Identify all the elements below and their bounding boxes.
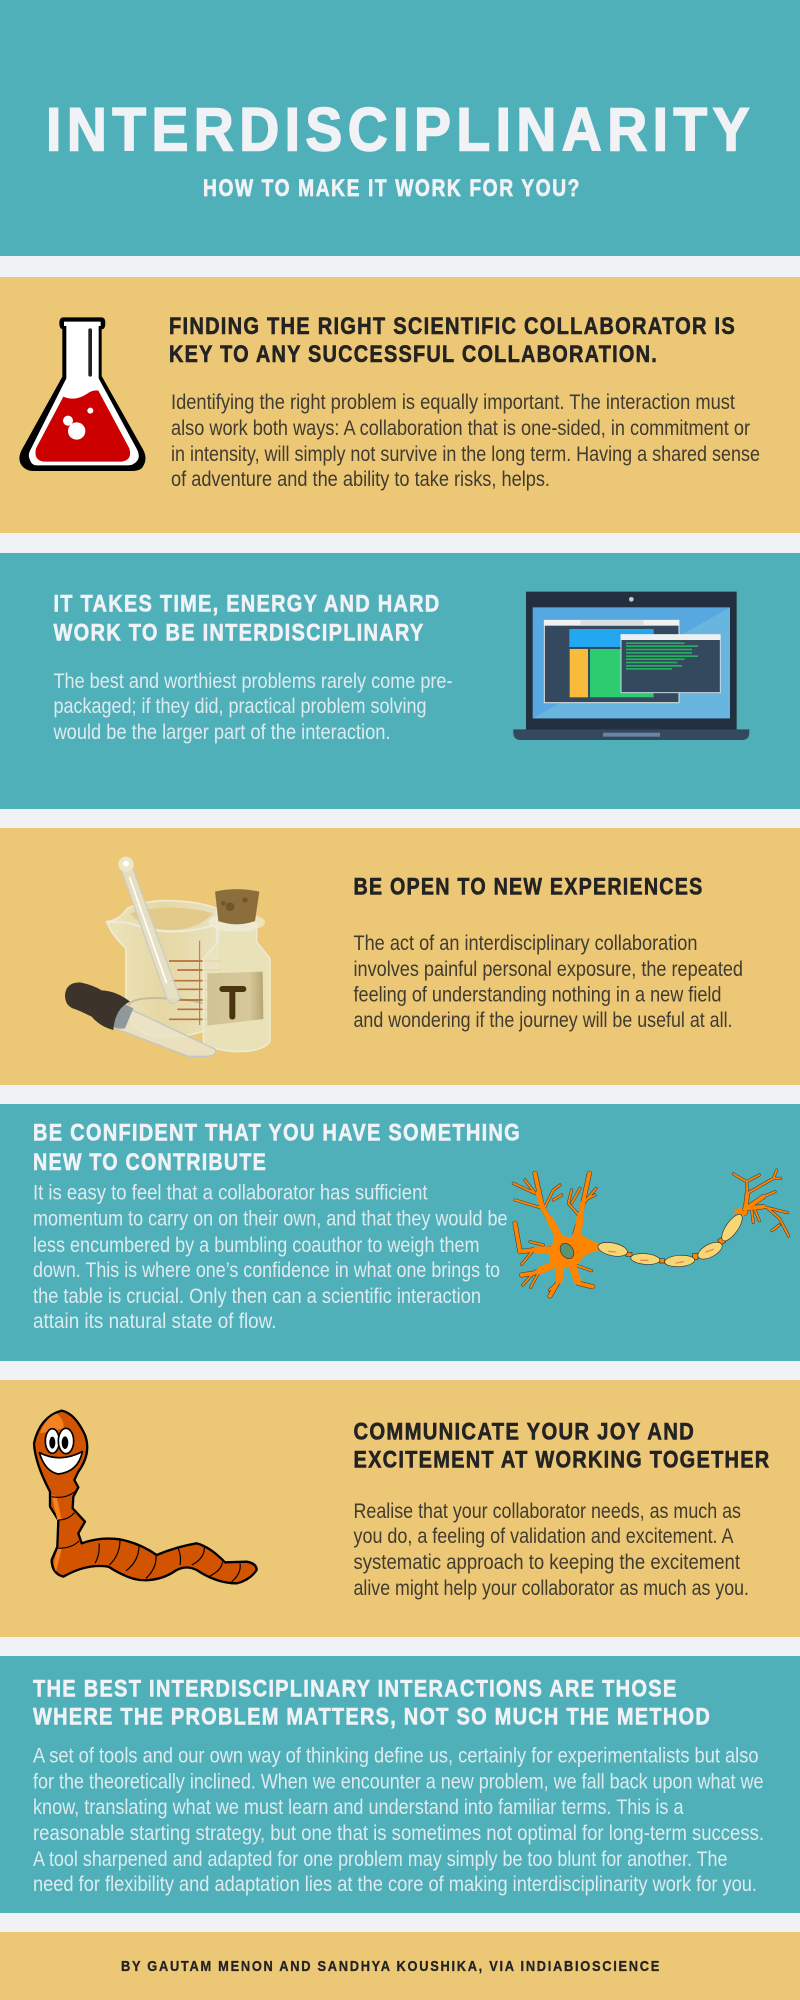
body text: down. This is where one’s confidence in what one brings to — [33, 1258, 500, 1282]
body text — [171, 390, 760, 491]
body text — [354, 931, 743, 1032]
body text: momentum to carry on on their own, and that they would be — [33, 1206, 508, 1230]
heading: KEY TO ANY SUCCESSFUL COLLABORATION. — [169, 341, 658, 368]
panel: be open to new experiences — [0, 828, 800, 1085]
body text — [354, 1499, 749, 1600]
icon: beaker, bottle and dropper — [65, 857, 270, 1056]
panel: the problem matters — [0, 1656, 800, 1913]
icon: laptop — [513, 592, 749, 740]
body text: know, translating what we must learn and understand into familiar terms. This is a — [33, 1795, 684, 1819]
icon: red flask — [19, 317, 145, 471]
heading — [54, 590, 440, 646]
panel: footer credit — [0, 1932, 800, 2000]
body text: The best and worthiest problems rarely come pre- — [54, 669, 452, 693]
heading: BE OPEN TO NEW EXPERIENCES — [354, 874, 704, 900]
heading — [33, 1676, 711, 1730]
credit text: BY GAUTAM MENON AND SANDHYA KOUSHIKA, VIA INDIABIOSCIENCE — [121, 1958, 661, 1975]
heading: THE BEST INTERDISCIPLINARY INTERACTIONS ARE THOSE — [33, 1676, 678, 1702]
body text: less encumbered by a bumbling coauthor to weigh them — [33, 1233, 480, 1257]
heading: WORK TO BE INTERDISCIPLINARY — [54, 620, 424, 646]
body text: of adventure and the ability to take risks, helps. — [171, 467, 550, 491]
body text: the table is crucial. Only then can a scientific interaction — [33, 1284, 481, 1308]
body text — [33, 1744, 764, 1896]
panel: communicate joy — [0, 1380, 800, 1637]
panel: be confident — [0, 1104, 800, 1361]
icon: neuron — [513, 1170, 789, 1296]
heading: NEW TO CONTRIBUTE — [33, 1149, 267, 1176]
heading: COMMUNICATE YOUR JOY AND — [354, 1418, 695, 1446]
body text: feeling of understanding nothing in a new field — [354, 982, 722, 1006]
body text: The act of an interdisciplinary collaboration — [354, 931, 698, 955]
subtitle: HOW TO MAKE IT WORK FOR YOU? — [203, 175, 581, 202]
body text — [53, 669, 453, 744]
heading: BE CONFIDENT THAT YOU HAVE SOMETHING — [33, 1120, 521, 1146]
panel: time and energy — [0, 553, 800, 809]
body text: would be the larger part of the interaction. — [53, 720, 391, 744]
body text: and wondering if the journey will be useful at all. — [354, 1008, 732, 1032]
body text: packaged; if they did, practical problem solving — [54, 694, 426, 718]
body text — [33, 1180, 508, 1333]
body text: attain its natural state of flow. — [33, 1309, 276, 1333]
heading — [354, 1418, 770, 1474]
panel: finding the right collaborator — [0, 277, 800, 533]
heading: IT TAKES TIME, ENERGY AND HARD — [54, 590, 440, 618]
body text: you do, a feeling of validation and excitement. A — [354, 1524, 734, 1548]
body text: systematic approach to keeping the excitement — [354, 1550, 740, 1574]
icon: smiling worm — [34, 1411, 257, 1583]
heading — [33, 1120, 521, 1176]
body text: It is easy to feel that a collaborator has sufficient — [33, 1180, 428, 1204]
panel: header — [0, 0, 800, 256]
heading — [169, 313, 736, 368]
